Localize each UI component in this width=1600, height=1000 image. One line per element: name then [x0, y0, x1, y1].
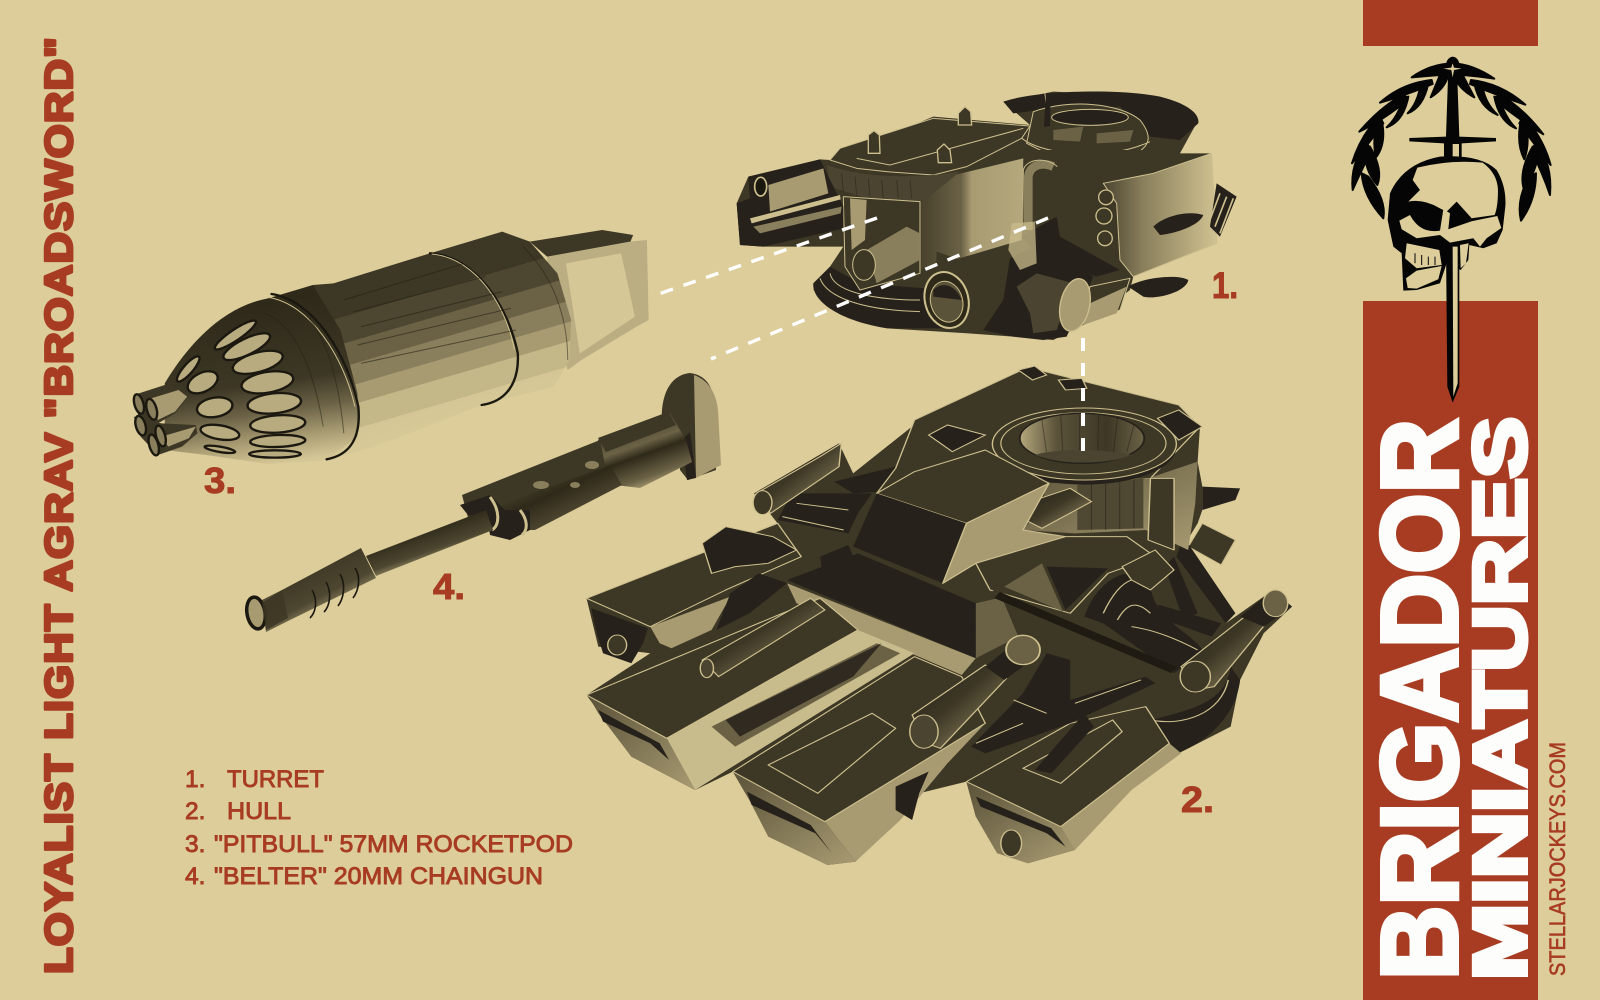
lower blob: [1128, 277, 1188, 297]
upper right cylinder: [1025, 488, 1091, 528]
muffler: [262, 548, 376, 632]
legend item 3: "PITBULL" 57MM ROCKETPOD: [214, 831, 573, 858]
bracket: [1008, 222, 1037, 270]
base disc: [813, 267, 950, 328]
barrel: [366, 510, 493, 576]
rocket pod illustration: [132, 230, 649, 464]
lower wedge: [787, 553, 1018, 675]
part number 3: 3.: [204, 460, 236, 501]
top sponson left: [587, 523, 801, 663]
rear fins: [1210, 183, 1237, 237]
upper left tube: [753, 443, 841, 515]
rocket tubes: [132, 385, 197, 456]
parts legend: [185, 766, 573, 890]
hull illustration: [587, 366, 1292, 865]
bottom plate: [962, 590, 1174, 727]
wreath right: [1450, 63, 1551, 221]
pod bands: [265, 247, 568, 459]
part number 2: 2.: [1181, 779, 1214, 820]
sword blade: [1446, 245, 1459, 403]
collar: [918, 252, 1003, 333]
central wedge: [853, 450, 1065, 583]
front mount: [1083, 278, 1130, 323]
logo: skull, sword and wreath: [1352, 57, 1551, 403]
chaingun illustration: [244, 373, 721, 632]
rear spar: [997, 595, 1174, 670]
turret illustration: [737, 91, 1237, 340]
skull: [1388, 156, 1505, 291]
legend item 2: HULL: [227, 798, 291, 825]
rear ring: [1003, 91, 1198, 157]
legend item 2: 2.: [185, 798, 205, 825]
sword: [1409, 57, 1496, 158]
right plate: [1103, 153, 1217, 277]
lower sponson left: [587, 598, 914, 790]
receiver: [598, 413, 692, 488]
lugs: [868, 107, 972, 163]
red brand bar top: [1363, 0, 1538, 46]
recess: [843, 197, 920, 290]
legend item 1: 1.: [185, 766, 205, 793]
left cables: [778, 467, 914, 533]
right big cylinder: [1180, 590, 1292, 692]
center clamp: [820, 545, 858, 587]
middle sponson: [733, 657, 985, 865]
upper drum side: [1023, 462, 1198, 550]
pod nose cone: [165, 285, 358, 464]
paddle mount: [662, 373, 716, 480]
brand wordmark miniatures: MINIATURES: [1458, 417, 1542, 980]
rear pedestal: [1027, 150, 1150, 237]
left long cylinder: [700, 598, 825, 678]
rocket pod connector: [653, 218, 877, 296]
legend item 4: "BELTER" 20MM CHAINGUN: [214, 863, 543, 890]
engine detail: [971, 653, 1155, 753]
upper hull plate: [877, 367, 1200, 523]
side pod: [867, 227, 920, 283]
website: STELLARJOCKEYS.COM: [1545, 742, 1570, 976]
muzzle: [244, 596, 268, 630]
rockets: [174, 317, 306, 458]
brand wordmark brigador: BRIGADOR: [1358, 419, 1480, 980]
part number 1: 1.: [1212, 265, 1238, 306]
wreath left: [1352, 63, 1453, 218]
hatch top plate: [830, 118, 1030, 175]
pod body: [313, 232, 571, 460]
legend item 1: TURRET: [227, 766, 324, 793]
right sponson: [966, 707, 1181, 863]
red brand bar main: [1363, 301, 1538, 1000]
hull skirt: [827, 165, 960, 202]
front drum: [1017, 273, 1073, 333]
pipe: [1028, 164, 1053, 230]
rear machinery: [1084, 487, 1240, 753]
turret silhouette: [737, 92, 1217, 340]
dashed connector lines: [653, 218, 1083, 452]
hull silhouette: [587, 367, 1292, 865]
legend item 1: [185, 766, 324, 793]
mid big cylinder: [910, 635, 1042, 748]
top lugs: [929, 366, 1202, 452]
clamp: [460, 495, 530, 540]
legend item 2: [185, 798, 291, 825]
main wall: [920, 158, 1023, 270]
vertical title: LOYALIST LIGHT AGRAV "BROADSWORD": [38, 36, 81, 974]
right assembly: [1022, 217, 1120, 277]
legend item 3: 3.: [185, 831, 205, 858]
legend item 4: 4.: [185, 863, 205, 890]
perforated housing: [462, 440, 606, 525]
part number 4: 4.: [433, 566, 465, 607]
gun box: [737, 159, 843, 247]
turret ring: [992, 408, 1176, 485]
hull connector: [1081, 338, 1085, 452]
rear mount box: [530, 230, 649, 370]
ports: [1096, 190, 1113, 246]
chaingun connector: [711, 218, 1048, 359]
mid plate: [976, 537, 1174, 613]
